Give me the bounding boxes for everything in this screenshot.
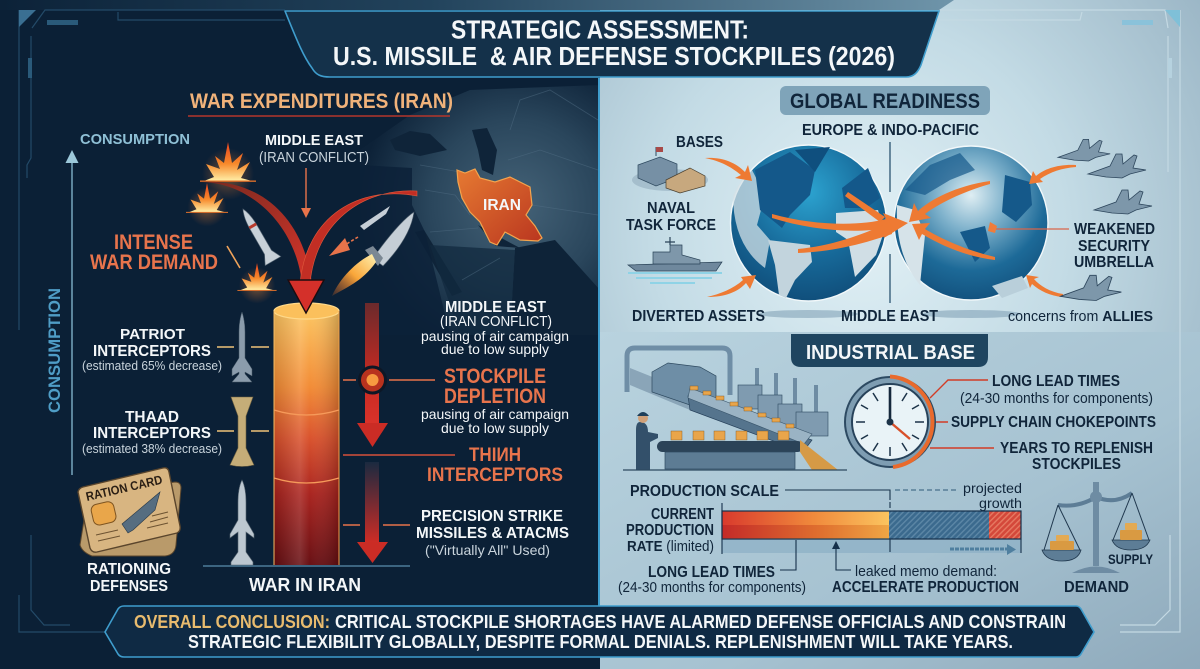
ration card icon: [78, 468, 181, 556]
patriot label: INTERCEPTORS: [93, 343, 211, 360]
icon: naval ship: [628, 237, 722, 283]
label: intense war demand: WAR DEMAND: [90, 251, 218, 274]
label: bases: BASES: [676, 134, 723, 151]
map of the Middle East: [360, 85, 600, 335]
consumption axis: [45, 131, 190, 475]
ground line: [203, 565, 410, 567]
label: intense war demand: [90, 231, 218, 274]
label: rationing defenses: DEFENSES: [90, 578, 168, 595]
label: precision strike: ("Virtually All" Used): [425, 542, 550, 558]
label: middle east top: [259, 132, 369, 166]
label: interceptors: THIИH: [469, 445, 521, 466]
icon: clock: [845, 376, 935, 467]
clock callouts: SUPPLY CHAIN CHOKEPOINTS: [951, 414, 1156, 431]
depletion arrow lower: [343, 462, 410, 563]
line to interceptors: [343, 454, 455, 456]
clock callouts: LONG LEAD TIMES: [992, 373, 1120, 390]
label: stockpile depletion: DEPLETION: [444, 385, 546, 408]
red curved arrows into stockpile: [200, 182, 417, 313]
clock callouts: YEARS TO REPLENISH: [1000, 440, 1153, 457]
third missile: [230, 480, 254, 565]
chart: production scale bar: projected: [963, 480, 1022, 496]
label: long lead times lower: LONG LEAD TIMES: [648, 564, 775, 581]
iran shape on map: IRAN: [483, 197, 521, 214]
iran shape on map: [457, 169, 542, 245]
depletion arrow upper: [343, 303, 435, 447]
arrows converging on middle east: [772, 181, 995, 260]
label: accelerate production: ACCELERATE PRODUCTION: [832, 579, 1019, 596]
icon: factory conveyor: [623, 348, 847, 470]
thaad label: THAAD: [125, 409, 179, 426]
label: weakened security umbrella: SECURITY: [1078, 238, 1150, 255]
panel: war expenditures: [45, 90, 569, 595]
title text: [333, 14, 895, 71]
banner: overall conclusion: OVERALL CONCLUSION:: [134, 612, 330, 632]
ground shadows: [758, 310, 858, 318]
panel: industrial base: [618, 334, 1156, 596]
label: demand: DEMAND: [1064, 579, 1129, 596]
label: current production rate: CURRENT: [651, 506, 714, 523]
label: weakened security umbrella: [988, 221, 1155, 271]
label: diverted assets: DIVERTED ASSETS: [632, 308, 765, 325]
frame: left tech border: [19, 10, 285, 632]
heading: industrial base: INDUSTRIAL BASE: [806, 342, 975, 364]
label: intense war demand: INTENSE: [114, 231, 193, 254]
missile falling left: [235, 204, 281, 265]
explosions: [186, 142, 277, 304]
label: long lead times lower: (24-30 months for components): [618, 579, 806, 596]
icon: fighter jets: [1058, 139, 1152, 300]
right light panel background: [600, 0, 1200, 669]
label: precision strike: PRECISION STRIKE: [421, 508, 563, 525]
panel divider: [598, 78, 600, 606]
label: current production rate: PRODUCTION: [626, 522, 714, 539]
label: stockpile depletion: [421, 365, 569, 436]
banner: overall conclusion: STRATEGIC FLEXIBILITY GLOBALLY, DESPITE FORMAL DENIALS. REPLENISHMENT WILL TAKE YEARS.: [188, 632, 1013, 652]
label: interceptors: [427, 445, 563, 486]
icon: balance scale: [1042, 482, 1150, 573]
small tracer missile: [227, 246, 240, 268]
clock callouts: (24-30 months for components): [960, 390, 1153, 407]
patriot label: (estimated 65% decrease): [82, 359, 222, 373]
left dark panel background: [0, 0, 600, 669]
globe: asia: [894, 146, 1048, 300]
title text: STRATEGIC ASSESSMENT:: [451, 14, 749, 44]
label: middle east top: (IRAN CONFLICT): [259, 149, 369, 166]
label: concerns from allies: concerns from ALLIES: [1008, 308, 1153, 325]
thaad label: (estimated 38% decrease): [82, 442, 222, 456]
panel: global readiness: [626, 86, 1155, 325]
consumption axis: CONSUMPTION: [45, 288, 64, 413]
label: accelerate production: [832, 541, 1019, 596]
label: naval task force: [626, 200, 716, 234]
ration card icon: RATION CARD: [85, 473, 164, 504]
label: middle east right: MIDDLE EAST: [445, 299, 546, 316]
label: accelerate production: leaked memo demand:: [855, 563, 997, 580]
label: precision strike: MISSILES & ATACMS: [416, 525, 569, 542]
label: middle east right: [421, 299, 569, 357]
missile launching: [332, 212, 414, 296]
clock callouts: [930, 373, 1156, 473]
label: weakened security umbrella: WEAKENED: [1074, 221, 1155, 238]
patriot missile: [217, 312, 269, 382]
globe: americas: [730, 145, 886, 301]
label: rationing defenses: [87, 561, 171, 595]
chart: production scale bar: [630, 480, 1022, 555]
title text: U.S. MISSILE & AIR DEFENSE STOCKPILES (2026): [333, 41, 895, 71]
label: stockpile depletion: due to low supply: [441, 420, 549, 436]
stockpile cylinder: [274, 303, 339, 565]
label: rationing defenses: RATIONING: [87, 561, 171, 578]
label: middle east: MIDDLE EAST: [841, 308, 938, 325]
label: middle east right: (IRAN CONFLICT): [440, 313, 552, 330]
thaad missile: [217, 397, 269, 466]
label: middle east right: pausing of air campaign: [421, 328, 569, 344]
thaad label: [82, 409, 222, 456]
industrial section background: [600, 332, 1200, 669]
label: middle east top: MIDDLE EAST: [265, 132, 363, 149]
top band: [0, 0, 954, 10]
chart: production scale bar: growth: [979, 495, 1022, 511]
clock callouts: STOCKPILES: [1032, 456, 1121, 473]
label: war in iran: WAR IN IRAN: [249, 575, 361, 595]
consumption axis: CONSUMPTION: [80, 131, 190, 148]
banner: overall conclusion: CRITICAL STOCKPILE SHORTAGES HAVE ALARMED DEFENSE OFFICIALS AND CONSTRAIN: [335, 612, 1066, 632]
chart: production scale bar: PRODUCTION SCALE: [630, 483, 779, 500]
label: current production rate: [626, 506, 714, 555]
title panel: [285, 11, 939, 77]
heading: global readiness: GLOBAL READINESS: [790, 90, 980, 113]
label: interceptors: INTERCEPTORS: [427, 465, 563, 486]
frame: right tech border: [940, 10, 1180, 632]
icon: bases buildings: [632, 147, 708, 193]
banner: overall conclusion: [105, 606, 1094, 657]
curved arrows from assets: [705, 158, 1076, 297]
label: precision strike: [416, 508, 569, 558]
label: naval task force: NAVAL: [647, 200, 695, 217]
label: stockpile depletion: STOCKPILE: [444, 365, 546, 388]
label: long lead times lower: [618, 540, 806, 596]
label: middle east right: due to low supply: [441, 341, 549, 357]
heading: industrial base: [791, 334, 988, 367]
heading: war expenditures: WAR EXPENDITURES (IRAN): [190, 90, 453, 113]
label: supply: SUPPLY: [1108, 551, 1154, 567]
label: europe and indo-pacific: EUROPE & INDO-PACIFIC: [802, 122, 979, 139]
patriot label: PATRIOT: [120, 326, 185, 343]
label: naval task force: TASK FORCE: [626, 217, 716, 234]
label: stockpile depletion: pausing of air campaign: [421, 406, 569, 422]
small missile upper right: [360, 206, 390, 230]
arrow: down from label: [301, 168, 311, 218]
label: weakened security umbrella: UMBRELLA: [1074, 254, 1154, 271]
thaad label: INTERCEPTORS: [93, 425, 211, 442]
patriot label: [82, 326, 222, 373]
orange dashed arrow: [329, 237, 358, 256]
label: current production rate: RATE (limited): [627, 538, 714, 555]
